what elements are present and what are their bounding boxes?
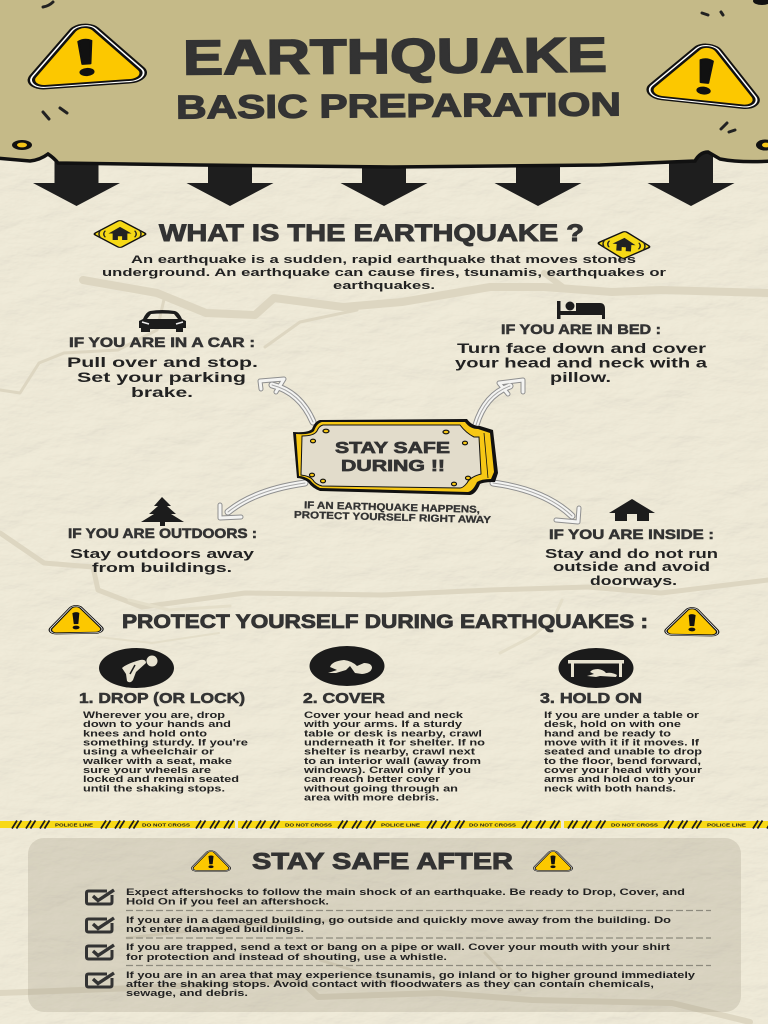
icon: warning triangle after left (197, 854, 225, 868)
panel: outdoors (68, 497, 257, 575)
sign: stay safe during (293, 419, 498, 495)
step 1: drop: 1. DROP (OR LOCK) (79, 691, 245, 707)
step 2: cover: table or desk is nearby, crawl (304, 728, 482, 738)
sign caption: PROTECT YOURSELF RIGHT AWAY (294, 510, 491, 526)
icon: house diamond left (93, 220, 147, 248)
step 1: drop (79, 648, 248, 794)
checklist text: not enter damaged buildings. (126, 924, 304, 934)
icon: cover figure (310, 646, 384, 686)
icon: house (609, 499, 655, 521)
checklist text: If you are trapped, send a text or bang on a pipe or wall. Cover your mouth with your shirt (126, 942, 670, 952)
icon: warning triangle protect left (56, 609, 96, 630)
icon: warning triangle right (663, 49, 748, 99)
panel: inside: outside and avoid (553, 559, 710, 574)
step 3: hold on: to the floor, bend forward, (544, 756, 701, 766)
step 1: drop: something sturdy. If you're (83, 738, 248, 748)
step 1: drop: walker with a seat, make (82, 756, 232, 766)
step 3: hold on: arms and hold on to your (544, 774, 696, 784)
title (176, 29, 621, 126)
icon: checkbox 1 (86, 890, 114, 904)
police tape divider: POLICE LINE (55, 822, 93, 828)
step 2: cover: shelter is nearby, crawl next (304, 746, 475, 756)
header banner (0, 0, 768, 167)
intro paragraph: underground. An earthquake can cause fires, tsunamis, earthquakes or (102, 267, 667, 279)
checklist text: If you are in an area that may experience tsunamis, go inland or to higher ground immediately (126, 970, 696, 980)
step 3: hold on: 3. HOLD ON (540, 691, 642, 707)
police tape divider (0, 820, 768, 828)
icon: checkbox 4 (86, 973, 114, 987)
icon: car (139, 310, 186, 332)
panel: in a car: brake. (131, 384, 193, 400)
panel: in bed: your head and neck with a (455, 354, 707, 370)
step 3: hold on: seated and unable to drop (544, 746, 703, 756)
step 3: hold on: If you are under a table or (544, 710, 700, 720)
sign: stay safe during: STAY SAFE (335, 440, 450, 457)
step 2: cover: to an interior wall (away from (304, 756, 481, 766)
panel: in a car: Set your parking (77, 369, 246, 385)
checklist text: Hold On if you feel an aftershock. (126, 896, 329, 906)
checklist text: for protection and instead of shouting, use a whistle. (126, 952, 447, 962)
step 2: cover: can reach better cover (304, 774, 441, 784)
step 1: drop: down to your hands and (83, 719, 231, 729)
sign: stay safe during: DURING !! (341, 458, 445, 475)
step 1: drop: Wherever you are, drop (83, 710, 226, 720)
panel: outdoors: IF YOU ARE OUTDOORS : (68, 525, 257, 541)
step 3: hold on: move with it if it moves. If (544, 738, 700, 748)
panel: in a car (67, 310, 258, 400)
panel: inside (545, 499, 718, 588)
step 2: cover: area with more debris. (304, 792, 439, 802)
heading: what is the earthquake: WHAT IS THE EARTHQUAKE ? (159, 220, 584, 247)
intro paragraph: earthquakes. (333, 280, 435, 292)
checklist text (126, 887, 696, 998)
checklist text: Expect aftershocks to follow the main shock of an earthquake. Be ready to Drop, Cover, and (126, 887, 685, 897)
ground cracks (0, 273, 768, 1022)
step 2: cover: underneath it for shelter. If no (304, 738, 486, 748)
sign caption (294, 500, 491, 526)
step 3: hold on: desk, hold on with one (544, 719, 681, 729)
sign caption: IF AN EARTHQUAKE HAPPENS, (304, 500, 480, 516)
police tape divider: DO NOT CROSS (285, 822, 332, 828)
panel: inside: doorways. (590, 573, 677, 588)
step 1: drop: using a wheelchair or (83, 746, 215, 756)
icon: warning triangle left (42, 31, 130, 79)
heading: protect yourself: PROTECT YOURSELF DURING EARTHQUAKES : (122, 612, 648, 633)
heading: stay safe after: STAY SAFE AFTER (252, 848, 513, 874)
icon: bed (557, 301, 605, 319)
downward arrows under banner (33, 150, 734, 206)
intro paragraph: An earthquake is a sudden, rapid earthquake that moves stones (131, 254, 636, 266)
icon: warning triangle after right (539, 854, 567, 868)
step 2: cover: 2. COVER (303, 691, 386, 707)
checklist text: sewage, and debris. (126, 988, 248, 998)
police tape divider: DO NOT CROSS (142, 822, 190, 828)
step 1: drop: locked and remain seated (83, 774, 239, 784)
step 2: cover: with your arms. If a sturdy (303, 719, 462, 729)
icon: warning triangle protect right (672, 611, 712, 632)
icon: drop figure (99, 648, 174, 688)
panel: in bed: IF YOU ARE IN BED : (501, 321, 661, 337)
title: BASIC PREPARATION (176, 85, 621, 126)
panel: stay safe after (28, 838, 741, 1012)
checklist text: If you are in a damaged building, go outside and quickly move away from the building. Do (126, 915, 672, 925)
step 1: drop: until the shaking stops. (83, 784, 225, 794)
step 3: hold on: cover your head with your (544, 765, 703, 775)
panel: inside: Stay and do not run (545, 546, 718, 561)
icon: house diamond right (596, 229, 652, 261)
police tape divider: POLICE LINE (381, 822, 420, 828)
intro paragraph (102, 254, 667, 292)
step 3: hold on (540, 648, 703, 794)
hollow arrows around sign (220, 379, 579, 522)
step 3: hold on: neck with both hands. (544, 784, 676, 794)
panel: in bed: pillow. (550, 369, 611, 385)
step 2: cover: Cover your head and neck (304, 710, 464, 720)
checklist text: after the shaking stops. Avoid contact with floodwaters as they can contain chemicals, (126, 979, 654, 989)
step 2: cover (303, 646, 486, 802)
icon: checkbox 3 (86, 945, 114, 959)
panel: in bed (455, 301, 707, 385)
title: EARTHQUAKE (183, 29, 607, 85)
icon: checkbox 2 (86, 918, 114, 932)
step 3: hold on: hand and be ready to (544, 728, 672, 738)
police tape divider: DO NOT CROSS (611, 822, 658, 828)
panel: inside: IF YOU ARE INSIDE : (549, 526, 714, 542)
panel: in a car: Pull over and stop. (67, 354, 258, 370)
step 2: cover: windows). Crawl only if you (303, 765, 471, 775)
step 1: drop: sure your wheels are (83, 765, 211, 775)
icon: hold on figure (558, 648, 634, 688)
panel: outdoors: Stay outdoors away (70, 546, 255, 561)
panel: in a car: IF YOU ARE IN A CAR : (69, 334, 255, 350)
panel: outdoors: from buildings. (92, 560, 232, 575)
police tape divider: DO NOT CROSS (469, 822, 516, 828)
step 2: cover: without going through an (303, 784, 458, 794)
step 1: drop: knees and hold onto (83, 728, 208, 738)
icon: tree (141, 497, 184, 526)
panel: in bed: Turn face down and cover (457, 340, 707, 356)
police tape divider: POLICE LINE (707, 822, 746, 828)
